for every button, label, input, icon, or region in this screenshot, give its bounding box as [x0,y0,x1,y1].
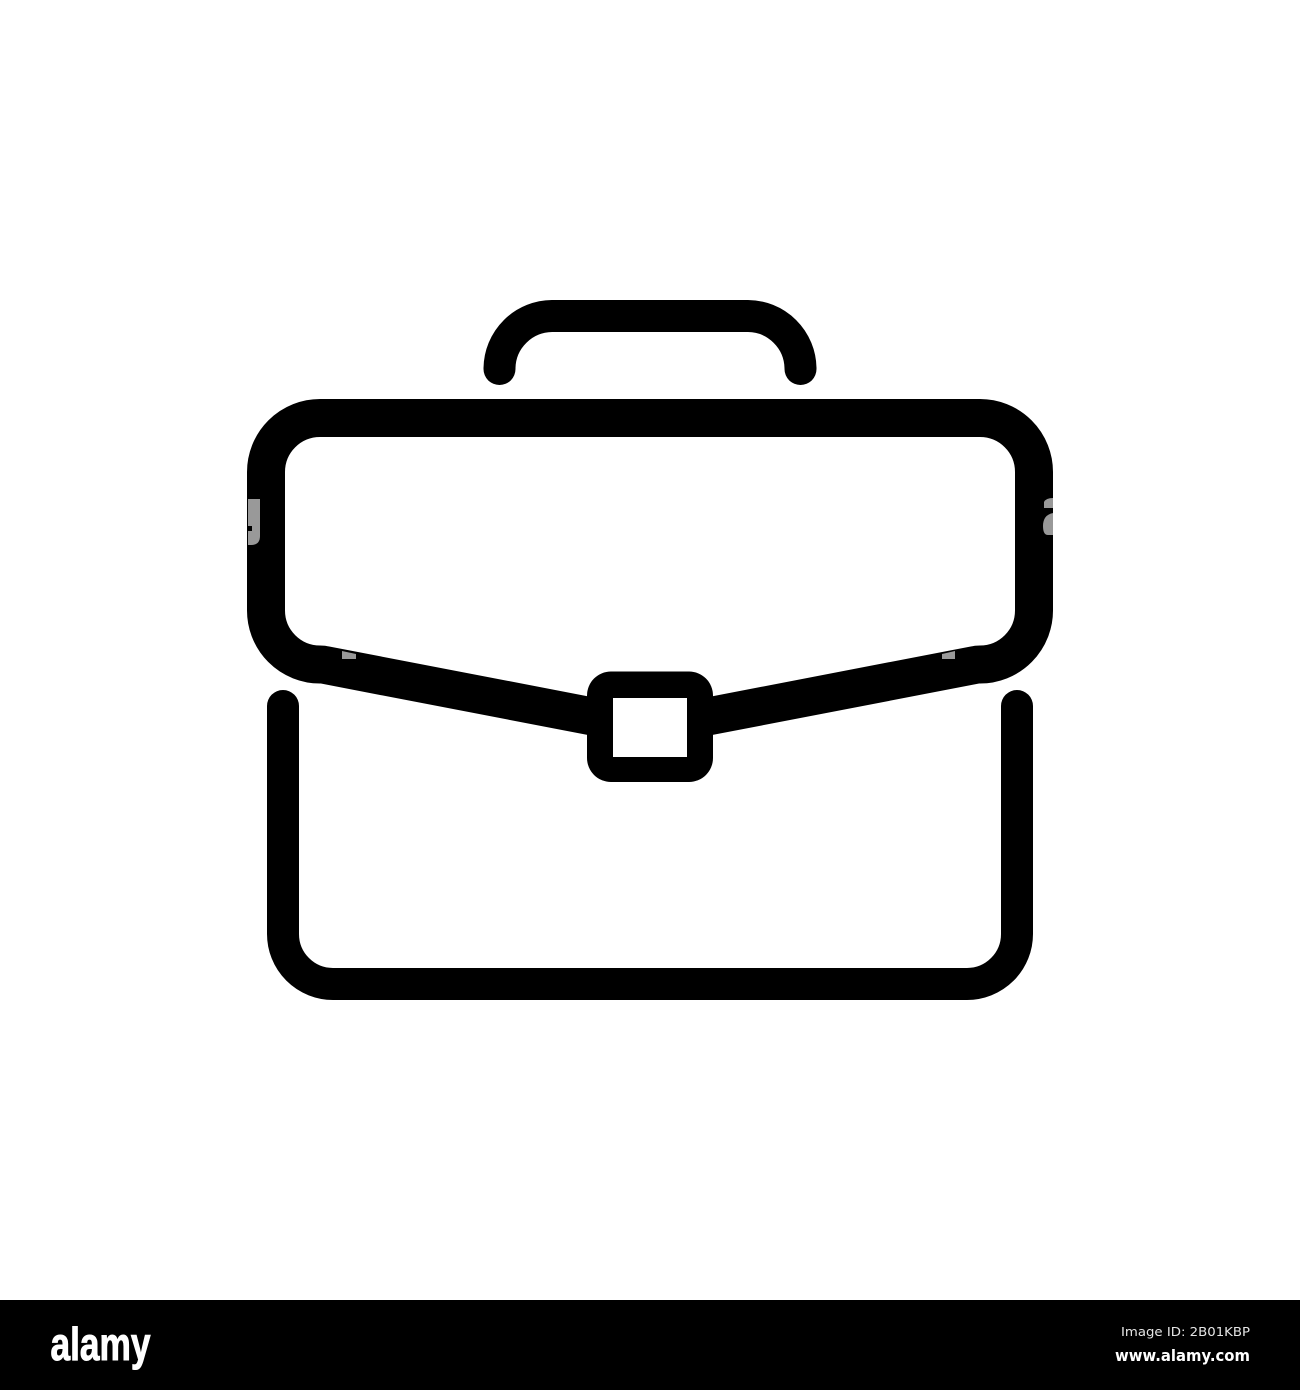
briefcase flap [266,418,1034,718]
briefcase handle [500,316,800,369]
footer banner [0,1300,1300,1390]
briefcase clasp [587,672,713,782]
briefcase body [283,706,1017,984]
website url: www.alamy.com [1115,1346,1250,1365]
alamy logo wordmark: alamy [50,1318,151,1370]
icon: briefcase [248,316,1053,984]
image ID: Image ID: 2B01KBP [1121,1324,1250,1339]
